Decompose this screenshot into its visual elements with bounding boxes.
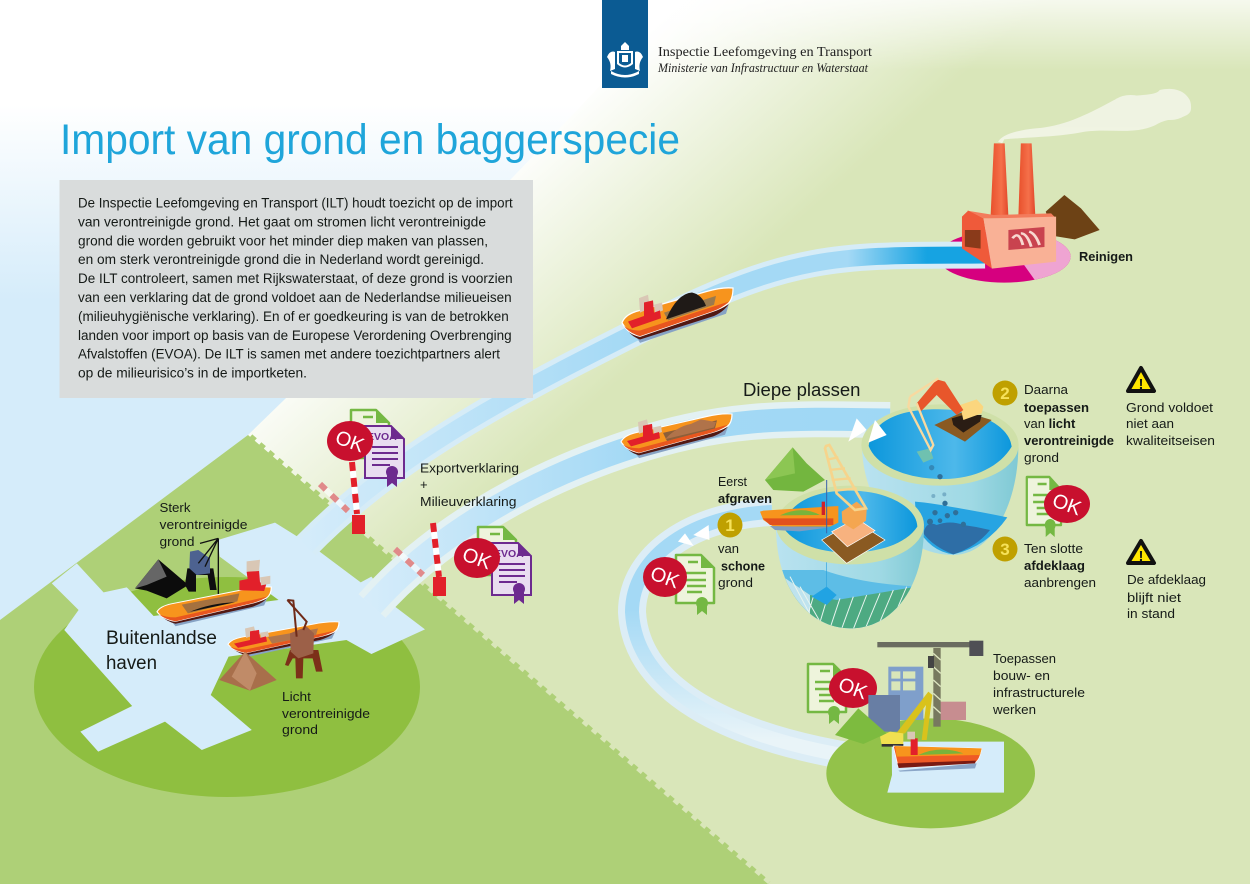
label: Buitenlandse haven: haven bbox=[106, 653, 157, 674]
step 1 badge: 1 bbox=[725, 516, 735, 535]
warning icon 1: ! bbox=[1138, 376, 1144, 393]
text: step 2: toepassen bbox=[1024, 400, 1089, 415]
label: Sterk verontreinigde grond: verontreinigde bbox=[160, 517, 248, 532]
intro text: grond die worden gebruikt voor het minder diep maken van plassen, bbox=[78, 233, 488, 248]
text: step 1: schone bbox=[721, 558, 765, 574]
channel: to cleaning plant bbox=[306, 255, 985, 546]
certificate by construction bbox=[808, 664, 877, 724]
text: construction bbox=[992, 651, 1085, 717]
label: Licht verontreinigde grond bbox=[282, 689, 370, 737]
text: step 1: Eerst bbox=[718, 474, 747, 489]
warning icon 2 bbox=[1128, 541, 1154, 565]
text: step 3: Ten slotte bbox=[1024, 541, 1083, 556]
step 3 badge: 3 bbox=[1000, 540, 1010, 559]
channel: to deep ponds bbox=[372, 419, 890, 606]
text: step 2: Daarna bbox=[1024, 382, 1069, 397]
text: step 3: aanbrengen bbox=[1024, 575, 1096, 590]
harbour water bbox=[52, 523, 425, 752]
ship at destination bbox=[898, 763, 977, 772]
intro text: op de milieurisico’s in de importketen. bbox=[78, 366, 307, 381]
label: Reinigen: Reinigen bbox=[1079, 249, 1133, 264]
text: warning 2 bbox=[1127, 572, 1206, 621]
chimneys bbox=[991, 143, 1008, 217]
back pond bbox=[861, 378, 1019, 555]
sinking soil bbox=[927, 465, 966, 527]
label: Sterk verontreinigde grond bbox=[160, 500, 248, 549]
text: step 2: grond bbox=[1024, 450, 1059, 465]
label: Buitenlandse haven: Buitenlandse bbox=[106, 628, 217, 649]
intro text bbox=[78, 196, 513, 381]
certificate by pond top bbox=[1027, 477, 1090, 537]
text: step 3 bbox=[1024, 541, 1096, 590]
certificate by pond left bbox=[643, 555, 714, 615]
plant ground bbox=[945, 232, 1071, 283]
text: step 3: afdeklaag bbox=[1024, 558, 1085, 573]
label: Licht verontreinigde grond: grond bbox=[282, 722, 318, 737]
step 2 badge bbox=[992, 380, 1018, 406]
background: sea bbox=[0, 0, 680, 650]
yellow excavator bbox=[895, 692, 932, 740]
border barrier 1 bbox=[320, 462, 365, 534]
destination ground bbox=[826, 718, 1035, 828]
ship with black cargo bbox=[622, 288, 733, 343]
step 2 badge: 2 bbox=[1000, 384, 1010, 403]
label: Diepe plassen: Diepe plassen bbox=[743, 379, 860, 400]
certificate pair EVOA 2 bbox=[454, 527, 531, 604]
text: warning 1: niet aan bbox=[1126, 416, 1174, 431]
intro text: en om sterk verontreinigde grond die in Nederland wordt gereinigd. bbox=[78, 252, 484, 267]
certificate pair EVOA 2: EVOA bbox=[494, 548, 524, 560]
ministry name bbox=[657, 45, 872, 75]
text: step 2: verontreinigde bbox=[1024, 433, 1114, 448]
label: Exportverklaring + Milieuverklaring: Milieuverklaring bbox=[420, 494, 516, 509]
factory bbox=[967, 211, 1056, 218]
text: construction: infrastructurele bbox=[993, 685, 1085, 700]
direction arrows lower bbox=[678, 525, 709, 546]
text: construction: Toepassen bbox=[993, 651, 1056, 666]
intro panel bbox=[60, 180, 533, 398]
brown crane bbox=[285, 600, 323, 678]
channel: from pond to construction bbox=[632, 512, 905, 764]
brown soil pile bbox=[219, 652, 277, 691]
title: Import van grond en baggerspecie bbox=[60, 116, 680, 164]
text: warning 2: blijft niet bbox=[1127, 590, 1181, 605]
text: construction: werken bbox=[992, 702, 1036, 717]
intro text: van een verklaring dat de grond voldoet aan de Nederlandse milieueisen bbox=[78, 290, 512, 305]
certificate by construction: OK bbox=[835, 674, 871, 704]
label: Licht verontreinigde grond: verontreinigde bbox=[282, 706, 370, 721]
text: warning 2: De afdeklaag bbox=[1127, 572, 1206, 587]
direction arrows bbox=[848, 418, 887, 443]
certificate by pond left: OK bbox=[647, 563, 683, 593]
text: warning 1: Grond voldoet bbox=[1126, 400, 1213, 415]
step 1 badge bbox=[718, 512, 742, 538]
warning icon 1 bbox=[1128, 368, 1154, 393]
ship with black cargo in harbour bbox=[157, 560, 271, 626]
certificate pair EVOA 2: OK bbox=[459, 544, 495, 574]
clean soil pile bbox=[765, 447, 825, 492]
ship in pond bbox=[760, 506, 838, 527]
certificate pair EVOA 1: EVOA bbox=[367, 431, 397, 443]
harbour land circle bbox=[34, 577, 420, 797]
certificate by pond top: OK bbox=[1049, 490, 1085, 520]
certificate pair EVOA 1 bbox=[327, 410, 404, 487]
text: step 1 bbox=[718, 474, 772, 590]
label: Exportverklaring + Milieuverklaring bbox=[420, 460, 519, 509]
warning icon 2: ! bbox=[1138, 548, 1144, 565]
text: step 2 bbox=[1024, 382, 1114, 465]
ship with brown cargo in harbour bbox=[228, 622, 339, 657]
text: warning 1: kwaliteitseisen bbox=[1126, 433, 1215, 448]
soil pile bbox=[1046, 195, 1100, 239]
intro text: Afvalstoffen (EVOA). De ILT is samen met andere toezichtpartners alert bbox=[78, 347, 500, 362]
ministry name: Inspectie Leefomgeving en Transport bbox=[658, 45, 872, 60]
excavator on pontoon bbox=[934, 412, 992, 442]
logo band bbox=[602, 0, 648, 88]
label: Sterk verontreinigde grond: grond bbox=[160, 534, 194, 549]
label: Sterk verontreinigde grond: Sterk bbox=[160, 500, 191, 515]
step 3 badge bbox=[992, 536, 1018, 562]
destination water bbox=[887, 742, 1004, 793]
intro text: De Inspectie Leefomgeving en Transport (ILT) houdt toezicht op de import bbox=[78, 196, 513, 210]
label: Licht verontreinigde grond: Licht bbox=[282, 689, 311, 704]
text: step 1: afgraven bbox=[718, 491, 772, 506]
dredging crane bbox=[822, 521, 885, 563]
ministry name: Ministerie van Infrastructuur en Waterstaat bbox=[657, 60, 868, 75]
text: step 1: van bbox=[718, 541, 739, 556]
label: Buitenlandse haven bbox=[106, 628, 217, 674]
cleaning plant bbox=[962, 143, 1100, 269]
intro text: landen voor import op basis van de Europese Verordening Overbrenging bbox=[78, 328, 512, 343]
border barrier 2 bbox=[395, 523, 446, 596]
text: construction: bouw- en bbox=[993, 668, 1050, 683]
building bbox=[888, 667, 923, 720]
label: Exportverklaring + Milieuverklaring: + bbox=[420, 477, 428, 492]
black crane bbox=[185, 538, 218, 600]
text: step 2: van licht bbox=[1024, 416, 1076, 431]
construction site bbox=[826, 641, 1035, 828]
text: warning 2: in stand bbox=[1127, 606, 1175, 621]
black soil pile bbox=[135, 559, 188, 598]
green soil pile bbox=[835, 708, 887, 744]
ship with brown cargo bbox=[621, 414, 732, 458]
text: step 1: grond bbox=[718, 575, 753, 590]
intro text: (milieuhygiënische verklaring). En of er goedkeuring is van de betrokken bbox=[78, 309, 509, 324]
foreign land bbox=[0, 435, 768, 884]
hatch bbox=[786, 576, 907, 628]
smoke bbox=[998, 89, 1191, 143]
certificate pair EVOA 1: OK bbox=[332, 427, 368, 457]
intro text: De ILT controleert, samen met Rijkswaterstaat, of deze grond is voorzien bbox=[78, 271, 513, 286]
front pond bbox=[760, 445, 927, 637]
tower crane bbox=[877, 642, 970, 647]
label: Exportverklaring + Milieuverklaring: Exportverklaring bbox=[420, 460, 519, 476]
text: warning 1 bbox=[1126, 400, 1215, 448]
logo crest bbox=[607, 42, 643, 78]
intro text: van verontreinigde grond. Het gaat om stromen licht verontreinigde bbox=[78, 214, 486, 229]
